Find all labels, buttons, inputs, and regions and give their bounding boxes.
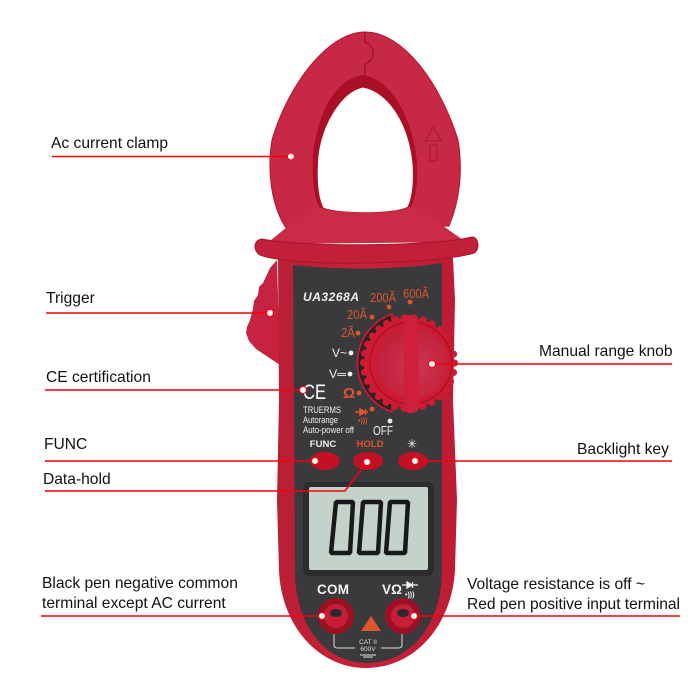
callout: manual range knob: Manual range knob xyxy=(539,343,673,360)
buttons xyxy=(310,452,428,470)
range labels: 2Ã xyxy=(341,325,355,340)
white range labels xyxy=(329,346,347,381)
callout: backlight key: Backlight key xyxy=(577,441,669,458)
dark front panel xyxy=(293,263,442,663)
terminal labels: •))) xyxy=(405,592,414,599)
icon: backlight star: ✳ xyxy=(407,437,417,451)
callout: black pen: terminal except AC current xyxy=(42,595,226,612)
diode and continuity symbol: •))) xyxy=(358,418,367,425)
feature text: Autorange xyxy=(303,415,338,425)
CAT II bracket: CAT II xyxy=(359,639,377,646)
white range labels: V~ xyxy=(332,346,347,360)
body shell xyxy=(277,258,457,668)
button labels xyxy=(310,439,384,450)
feature text xyxy=(303,405,354,435)
callout: CE certification: CE certification xyxy=(46,369,151,386)
callout: red pen: Red pen positive input terminal xyxy=(467,596,680,613)
LCD bezel xyxy=(303,482,434,576)
trigger xyxy=(246,260,280,365)
terminal labels: VΩ xyxy=(382,582,402,597)
callout: manual range knob xyxy=(428,343,673,368)
CE mark: CE xyxy=(303,381,326,404)
LCD screen xyxy=(309,487,428,570)
meter illustration xyxy=(246,32,478,668)
callout: ac current clamp xyxy=(51,135,294,160)
OFF label: OFF xyxy=(373,423,393,438)
warning triangle xyxy=(361,616,381,631)
terminal labels xyxy=(317,582,418,599)
LCD digits xyxy=(331,502,408,553)
range labels xyxy=(341,286,429,402)
callout: CE certification xyxy=(45,369,306,394)
callout: data-hold: Data-hold xyxy=(43,471,111,488)
inner rim xyxy=(313,75,417,208)
callout: trigger xyxy=(46,290,274,316)
callout: backlight key xyxy=(412,441,672,464)
callout: black pen xyxy=(41,575,326,620)
callout: trigger: Trigger xyxy=(46,290,95,307)
feature text: TRUERMS xyxy=(303,405,341,415)
range labels: 600Ã xyxy=(403,286,429,301)
range labels: 200Ã xyxy=(370,290,396,305)
callout: red pen: Voltage resistance is off ~ xyxy=(467,576,645,593)
callout: data-hold xyxy=(43,458,370,491)
selector dots xyxy=(348,300,412,423)
diode and continuity symbol xyxy=(355,409,368,425)
range labels: Ω xyxy=(343,385,355,402)
callout: ac current clamp: Ac current clamp xyxy=(51,135,168,152)
terminal labels: COM xyxy=(317,582,349,597)
CAT II bracket: 600V xyxy=(360,646,376,653)
range labels: 20Ã xyxy=(347,307,367,322)
range knob xyxy=(357,314,454,413)
button labels: FUNC xyxy=(310,439,336,450)
button labels: HOLD xyxy=(357,439,384,450)
feature text: Auto-power off xyxy=(303,425,354,435)
callout: FUNC xyxy=(44,436,318,464)
clamp flange xyxy=(255,207,478,263)
white range labels: V═ xyxy=(329,367,347,381)
current clamp jaw xyxy=(270,32,460,228)
callout: FUNC: FUNC xyxy=(44,436,87,453)
callout: red pen xyxy=(410,576,680,620)
model name: UA3268A xyxy=(303,290,359,304)
input terminals xyxy=(318,598,421,634)
CAT II bracket xyxy=(334,634,402,657)
warning mark on jaw xyxy=(425,127,441,161)
callout: black pen: Black pen negative common xyxy=(42,575,238,592)
